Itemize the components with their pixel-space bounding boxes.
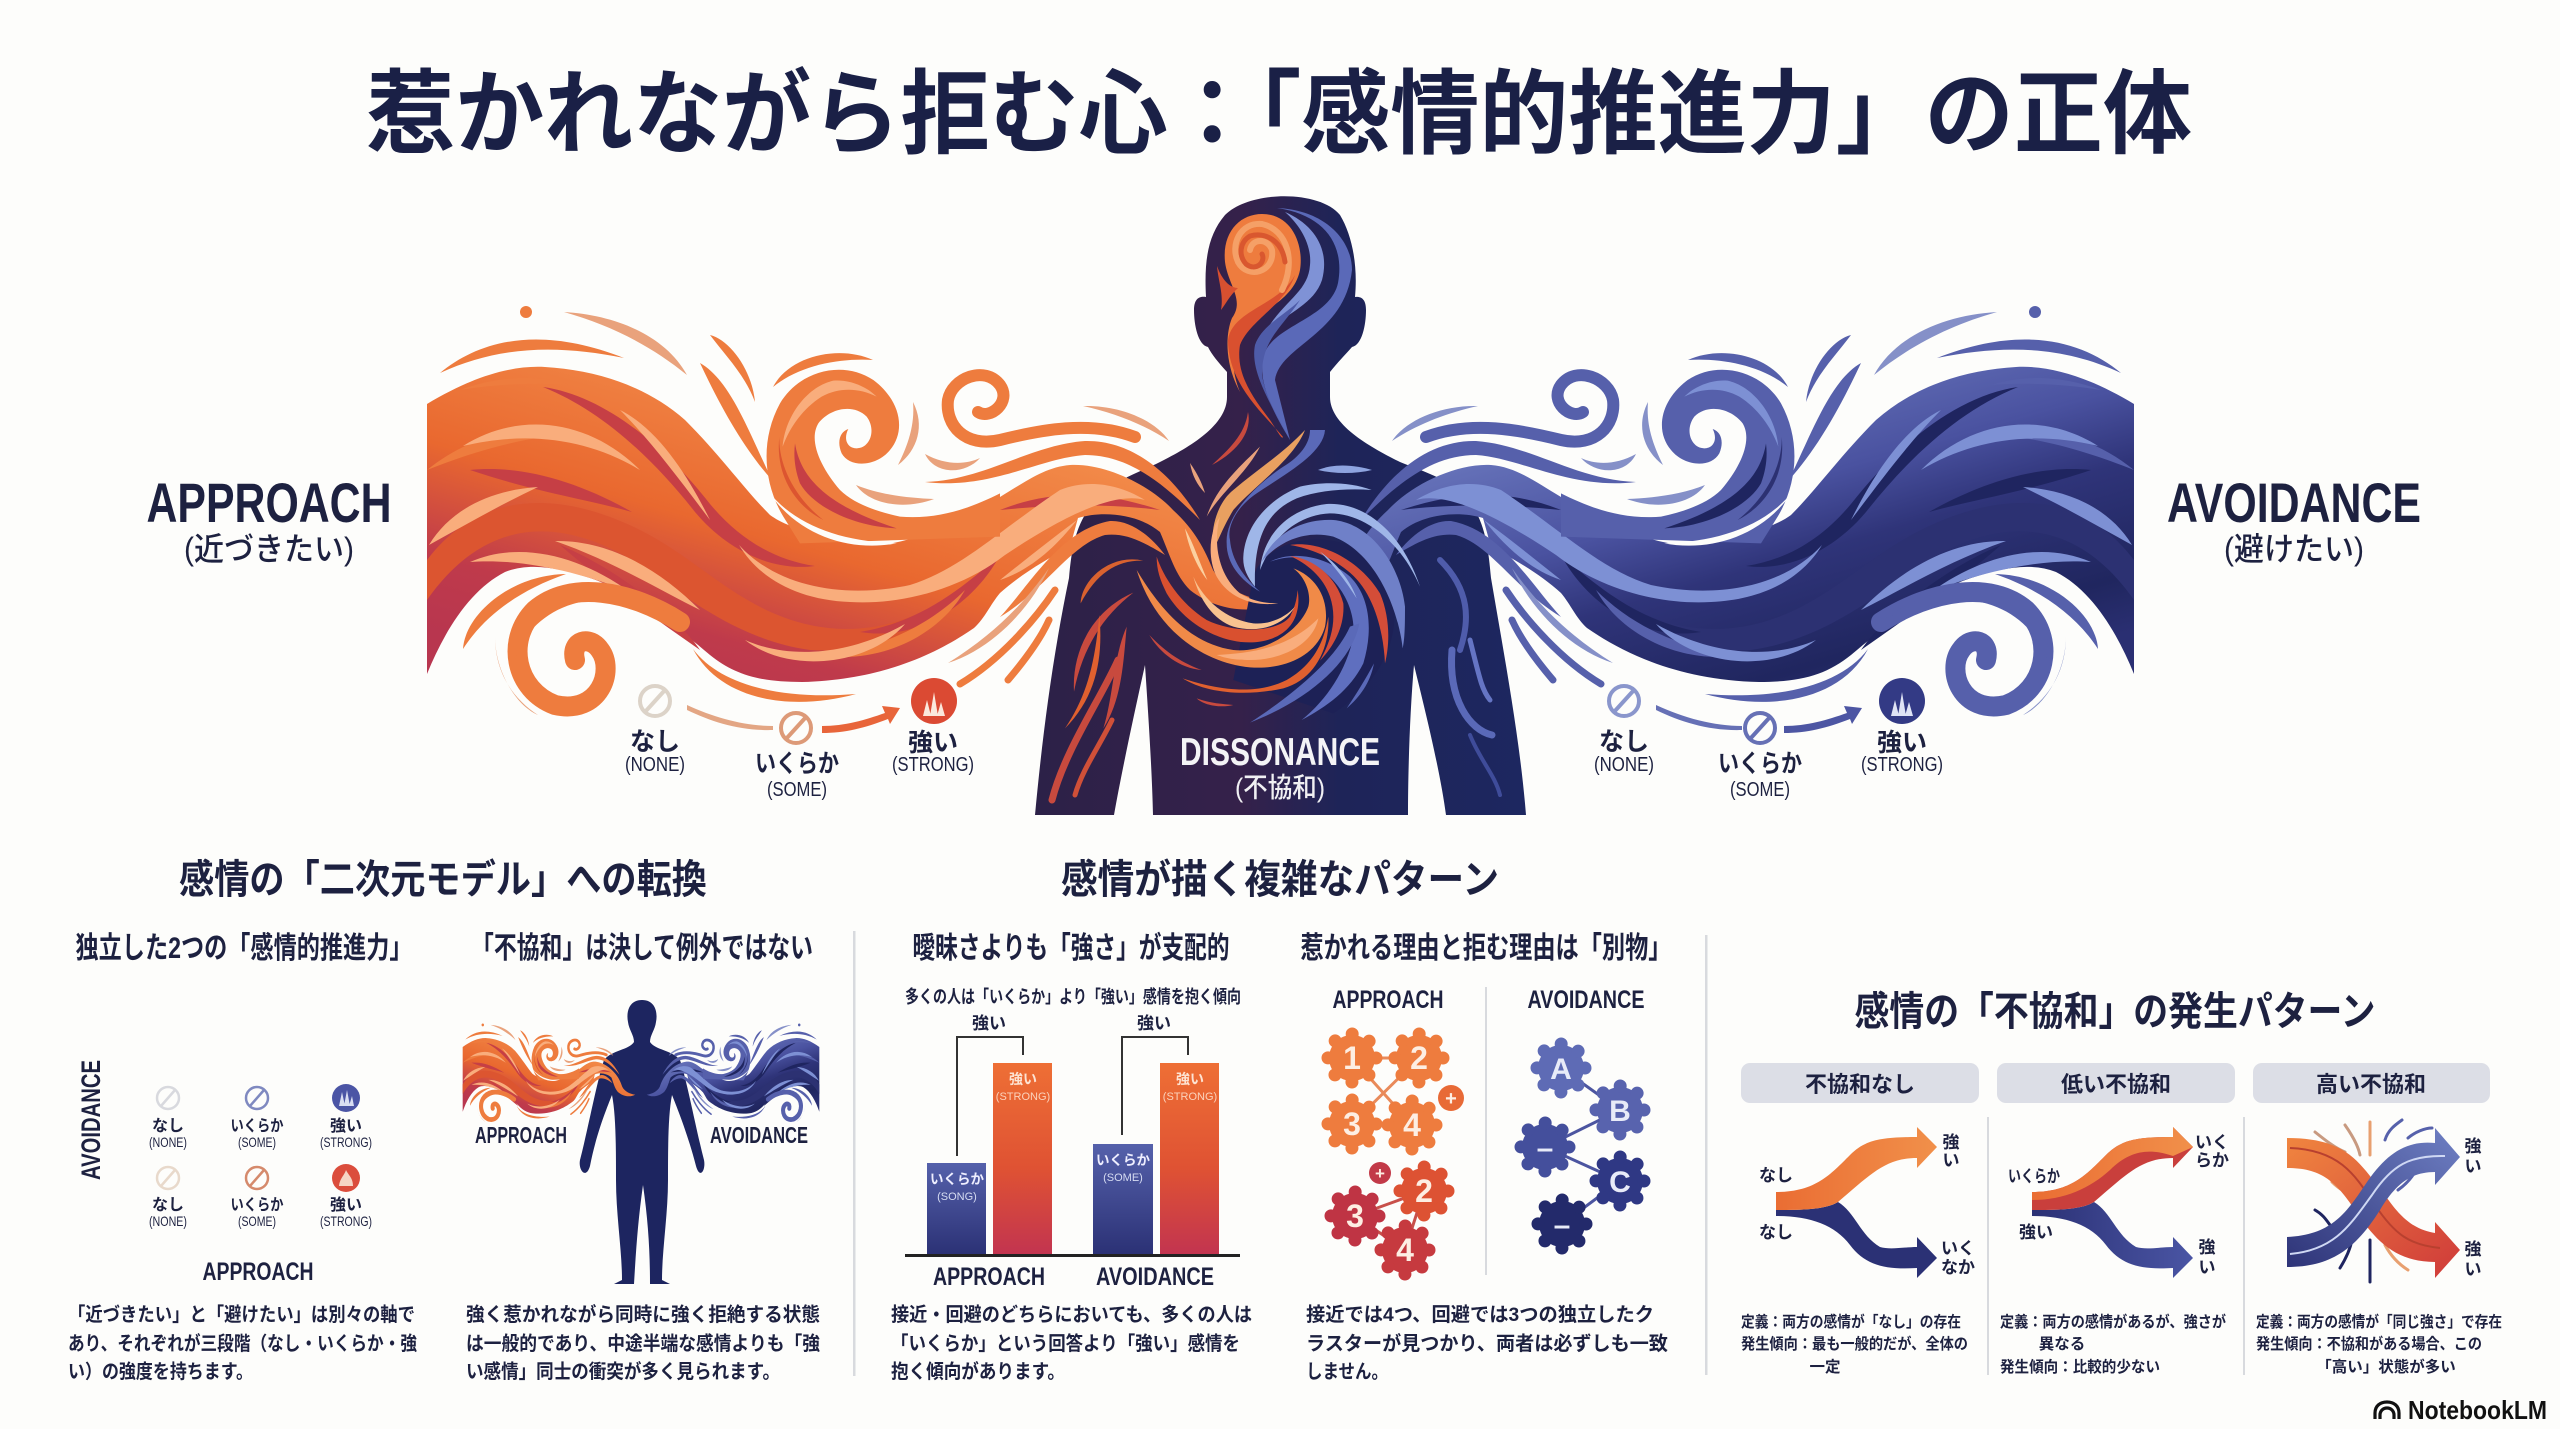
subheading: 「不協和」は決して例外ではない [471,932,813,965]
labels: (NONE) [625,754,685,776]
bar chart: 強い [1009,1071,1037,1087]
diagram: low dissonance [2008,1127,2229,1278]
icon: none [1609,686,1639,716]
definition texts: 定義：両方の感情が「同じ強さ」で存在 [2256,1312,2502,1331]
labels: なし [630,728,680,756]
grid of intensity icons: なし [152,1117,184,1135]
definition texts: 発生傾向：不協和がある場合、この [2256,1334,2482,1353]
tab: none: 不協和なし [1805,1072,1915,1097]
mini labels: AVOIDANCE [710,1122,808,1148]
title: 惹かれながら拒む心：「感情的推進力」の正体 [366,64,2192,166]
approach clusters: 1 [1343,1040,1361,1076]
grid of intensity icons: (STRONG) [320,1134,372,1150]
section heading: dissonance patterns: 感情の「不協和」の発生パターン [1854,990,2376,1034]
approach clusters: 2 [1415,1173,1433,1209]
panel: strength dominates [853,931,1252,1383]
diagram: low dissonance: い [2198,1258,2216,1277]
approach clusters: + [1445,1088,1457,1110]
diagram: no dissonance: 強 [1942,1133,1960,1152]
avoidance cluster: C [1609,1166,1631,1199]
subheading: 独立した2つの「感情的推進力」 [76,932,412,965]
avoidance cluster [1521,1044,1644,1248]
panel: two drives [68,932,417,1383]
bar chart: (SONG) [937,1191,977,1203]
body text: 強く惹かれながら同時に強く拒絶する状態 [466,1303,820,1326]
diagram: no dissonance: い [1942,1151,1960,1170]
central figure with approach and avoidance waves [427,196,2134,815]
subheading: 惹かれる理由と拒む理由は「別物」 [1300,932,1672,965]
body text: 「近づきたい」と「避けたい」は別々の軸で [68,1304,415,1326]
axis label: approach: APPROACH [202,1258,314,1286]
body text: しません。 [1306,1361,1388,1383]
dissonance label: DISSONANCE [1180,731,1380,774]
approach label [146,471,392,567]
tab: none [1741,1063,1979,1103]
mini approach wave [463,1023,635,1122]
bar chart: (STRONG) [1163,1091,1217,1103]
grid of intensity icons: (SOME) [238,1213,276,1229]
diagram: high dissonance: い [2464,1260,2482,1279]
subheading: 曖昧さよりも「強さ」が支配的 [912,931,1230,965]
body text: 接近では4つ、回避では3つの独立したク [1306,1304,1654,1326]
bar chart: いくらか [1096,1152,1150,1168]
tab: high: 高い不協和 [2316,1072,2426,1097]
diagram: high dissonance: い [2464,1157,2482,1176]
avoidance label: AVOIDANCE [2167,471,2421,534]
cluster headers: APPROACH [1332,986,1444,1014]
diagram: low dissonance: 強 [2198,1238,2216,1257]
grid of intensity icons: 強い [330,1196,362,1214]
dissonance label: (不協和) [1235,773,1325,803]
diagram: high dissonance: 強 [2464,1137,2482,1156]
diagram: no dissonance: なし [1759,1223,1793,1242]
bar chart: 強い [1137,1014,1171,1033]
avoidance cluster: A [1550,1053,1572,1086]
labels: いくらか [1718,750,1802,778]
mini labels [475,1122,808,1148]
avoidance intensity scale [1594,678,1943,801]
definition texts: 定義：両方の感情が「なし」の存在 [1741,1312,1961,1331]
icon: some [1745,713,1775,743]
approach clusters: 4 [1403,1107,1421,1143]
section heading: patterns: 感情が描く複雑なパターン [1061,858,1499,902]
panel: dissonance patterns [1705,935,2502,1376]
vortex [1065,430,1420,728]
bar chart: (STRONG) [996,1091,1050,1103]
body text: 「いくらか」という回答より「強い」感情を [891,1332,1240,1355]
avoidance cluster: – [1554,1209,1570,1242]
panel: dissonance is no exception [463,932,820,1383]
avoidance label: (避けたい) [2224,531,2364,567]
labels: (SOME) [767,779,827,801]
section heading: model: 感情の「二次元モデル」への転換 [179,857,707,902]
approach clusters: 3 [1343,1106,1361,1142]
body text: ラスターが見つかり、両者は必ずしも一致 [1306,1332,1668,1355]
labels: (STRONG) [892,754,974,776]
approach intensity scale [625,678,974,801]
grid of intensity icons [149,1084,372,1229]
tab: low [1997,1063,2235,1103]
diagram: high dissonance: 強 [2464,1240,2482,1259]
icon: strong [1879,678,1925,724]
definition texts: 一定 [1809,1358,1841,1376]
mini avoidance wave [647,1023,819,1122]
axis label: avoidance: AVOIDANCE [76,1060,106,1180]
icon: strong [911,678,957,724]
lower arm and torso streaks [1052,560,1500,800]
body text: あり、それぞれが三段階（なし・いくらか・強 [68,1332,417,1355]
avoidance label [2167,471,2421,567]
panel: separate reasons [1300,932,1672,1383]
avoidance wave [1284,306,2134,715]
grid of intensity icons: (NONE) [149,1213,187,1229]
bar chart [905,1014,1240,1291]
labels: いくらか [755,750,839,778]
approach label: (近づきたい) [184,531,354,567]
bar chart: AVOIDANCE [1096,1263,1214,1291]
arrow: some to strong [822,706,900,733]
arrow: none to some [687,705,773,730]
bar chart: (SOME) [1103,1172,1143,1184]
body text: い感情」同士の衝突が多く見られます。 [466,1360,780,1383]
body text [1306,1304,1668,1383]
mini labels: APPROACH [475,1122,567,1148]
chart note: 多くの人は「いくらか」より「強い」感情を抱く傾向 [905,986,1241,1007]
definition texts: 異なる [2039,1335,2085,1353]
labels: (NONE) [1594,754,1654,776]
grid of intensity icons: いくらか [230,1117,284,1135]
labels: (SOME) [1730,779,1790,801]
labels: 強い [908,729,958,757]
cluster headers [1332,986,1644,1275]
avoidance cluster: B [1609,1095,1631,1128]
approach label: APPROACH [146,471,392,534]
approach clusters: 4 [1396,1232,1414,1268]
diagram: high dissonance [2287,1120,2482,1282]
grid of intensity icons: いくらか [230,1196,284,1214]
approach clusters: + [1375,1164,1385,1183]
arrow: some to strong [1784,706,1862,733]
definition texts [1741,1312,2502,1376]
grid of intensity icons: (NONE) [149,1134,187,1150]
body text: は一般的であり、中途半端な感情よりも「強 [466,1332,820,1355]
body silhouette [1035,196,1526,815]
labels [625,728,974,801]
diagram: no dissonance: いく [1941,1239,1975,1258]
labels: 強い [1877,729,1927,757]
tab: high [2253,1063,2490,1103]
approach clusters [1328,1034,1464,1274]
definition texts: 定義：両方の感情があるが、強さが [2000,1312,2226,1331]
tab: low: 低い不協和 [2061,1072,2171,1097]
diagram: low dissonance: いくらか [2008,1167,2060,1186]
definition texts: 発生傾向：最も一般的だが、全体の [1741,1334,1968,1353]
bar chart: いくらか [930,1171,984,1187]
head swirl [1217,208,1352,440]
avoidance cluster: – [1537,1132,1553,1165]
diagram: low dissonance: 強い [2019,1223,2053,1242]
spray ticks [2310,1120,2432,1282]
labels: (STRONG) [1861,754,1943,776]
bar chart: 強い [1176,1071,1204,1087]
approach clusters: 2 [1410,1040,1428,1076]
dissonance label [1180,731,1380,803]
diagram: low dissonance: いく [2195,1133,2229,1152]
approach wave [427,306,1277,715]
arrow: none to some [1656,705,1742,730]
definition texts: 発生傾向：比較的少ない [2000,1358,2160,1376]
grid of intensity icons: (STRONG) [320,1213,372,1229]
diagram: no dissonance: なか [1941,1258,1975,1277]
body text [68,1304,417,1383]
body text: 接近・回避のどちらにおいても、多くの人は [891,1304,1252,1326]
diagram: no dissonance [1759,1127,1975,1278]
definition texts: 「高い」状態が多い [2316,1357,2456,1376]
cluster headers: AVOIDANCE [1528,986,1644,1014]
body text: 抱く傾向があります。 [891,1360,1065,1383]
mini body [580,1000,704,1284]
body text [891,1304,1252,1383]
approach clusters: 3 [1346,1198,1364,1234]
neck and chest streaks [1190,412,1372,493]
grid of intensity icons: (SOME) [238,1134,276,1150]
icon: some [781,713,811,743]
bar chart: 強い [972,1014,1006,1033]
labels [1594,728,1943,801]
diagram: no dissonance: なし [1759,1166,1793,1185]
diagram: low dissonance: らか [2195,1151,2229,1170]
icon: none [640,686,670,716]
body text: い）の強度を持ちます。 [68,1361,253,1383]
grid of intensity icons: なし [152,1196,184,1214]
mini figure [463,1000,819,1284]
grid of intensity icons: 強い [330,1117,362,1135]
bar chart: APPROACH [933,1263,1045,1291]
labels: なし [1599,728,1649,756]
body text [466,1303,820,1383]
